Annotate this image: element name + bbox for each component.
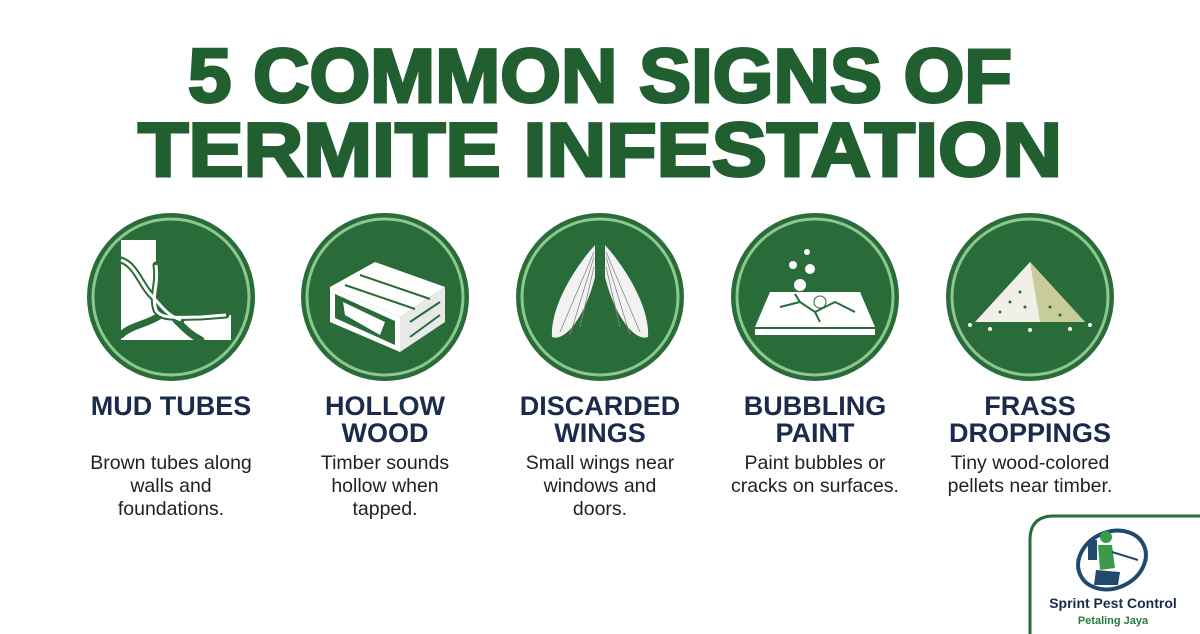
descriptions: Tiny wood-colored [951,452,1109,474]
headings: PAINT [776,418,855,448]
headings [91,391,1111,448]
icon: logo emblem [1068,520,1156,600]
descriptions: foundations. [118,498,224,520]
logo box [1030,516,1200,634]
icon: discarded wings [516,213,684,381]
icon: hollow wood [301,213,469,381]
headings: DROPPINGS [949,418,1111,448]
title [138,34,1062,193]
title: TERMITE INFESTATION [138,108,1062,193]
descriptions: doors. [573,498,627,520]
icon: frass droppings [946,213,1114,381]
descriptions: Paint bubbles or [745,452,886,474]
title: 5 COMMON SIGNS OF [188,34,1012,119]
headings: WINGS [554,418,646,448]
descriptions: Brown tubes along [90,452,252,474]
headings: HOLLOW [325,391,445,421]
descriptions: tapped. [352,498,418,520]
headings: MUD TUBES [91,391,251,421]
headings: BUBBLING [744,391,886,421]
descriptions [90,452,1112,520]
logo box: Petaling Jaya [1078,615,1149,627]
headings: FRASS [984,391,1076,421]
descriptions: hollow when [331,475,439,497]
descriptions: Small wings near [526,452,675,474]
descriptions: pellets near timber. [948,475,1112,497]
logo text: Sprint Pest Control [1049,595,1177,611]
descriptions: Timber sounds [321,452,449,474]
headings: WOOD [342,418,428,448]
icon: mud tubes [87,213,255,381]
headings: DISCARDED [520,391,680,421]
descriptions: windows and [543,475,656,497]
descriptions: cracks on surfaces. [731,475,899,497]
icon: bubbling paint [731,213,899,381]
descriptions: walls and [129,475,212,497]
